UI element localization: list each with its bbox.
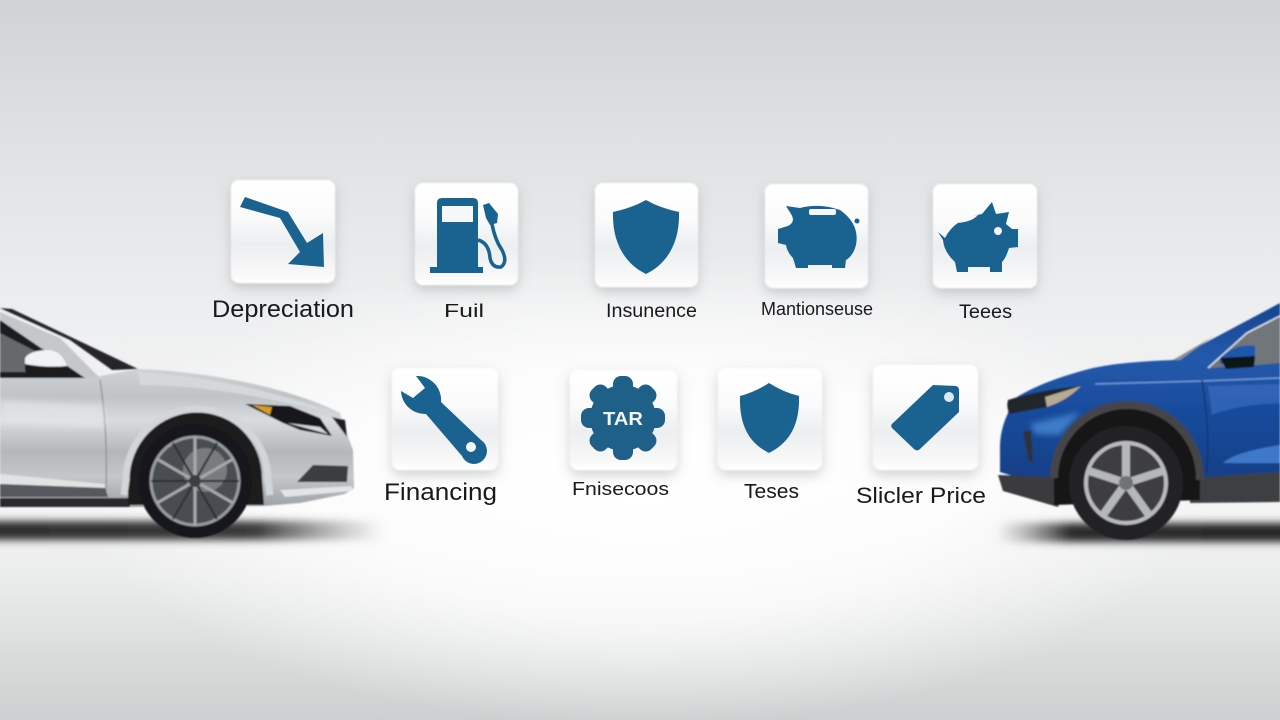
blue car belt line [1095,378,1280,384]
silver car side sill [0,474,130,507]
silver car door seam [100,380,106,493]
cost item: taxes [718,368,822,503]
cost item: fuel [415,183,518,321]
label: Insunence [606,301,697,322]
silver car mirror [25,350,68,377]
card [765,184,868,288]
blue car ground shadow [995,523,1280,542]
icon: price tag [891,385,959,450]
icon: gear with tax text: TAR [603,409,643,429]
blue car [995,303,1280,542]
blue car door seam [1202,380,1208,473]
blue car door highlight [1208,384,1280,463]
icon: shield [740,383,799,453]
icon: wrench [401,376,487,464]
silver car [0,308,385,540]
card [415,183,518,285]
silver car body [0,369,354,507]
label: Financing [384,479,497,506]
icon: shield [613,200,679,274]
icon: downward arrow [240,197,324,267]
card [595,183,698,287]
icon: piggy bank facing right [938,202,1018,272]
label: Teees [959,302,1012,323]
silver car wheel [138,424,252,538]
blue car lower trim [998,472,1280,507]
blue car side window [1208,316,1280,368]
label: Teses [744,481,799,503]
icon: piggy bank facing left [778,206,860,268]
blue car body [1000,303,1280,490]
silver car wheel arch [128,411,264,505]
cost item: depreciation [212,180,354,323]
silver car hood highlight [138,372,335,414]
label: Fuil [444,301,484,321]
blue car headlight [1007,386,1081,414]
cost item: financing [384,368,498,506]
card [392,368,498,470]
card [718,368,822,470]
silver car grille [280,417,352,497]
silver car headlight [245,404,332,436]
blue car wheel arch [1054,405,1200,505]
blue car windshield [1173,336,1214,360]
icon: fuel pump [430,198,505,273]
blue car bumper highlight [1023,412,1080,462]
blue car mirror [1220,346,1255,369]
card [231,180,335,283]
cost item: insurance [595,183,698,322]
cost item: fees [933,184,1037,323]
silver car ground shadow [0,521,385,540]
label: Depreciation [212,296,354,323]
blue car wheel [1069,426,1183,540]
card [873,365,978,470]
silver car roof and window [0,308,138,378]
card [933,184,1037,288]
label: Fnisecoos [572,479,669,499]
cost item: finance costs [570,370,677,499]
card [570,370,677,470]
label: Mantionseuse [761,299,873,319]
cost item: sticker price [856,365,986,508]
label: Slicler Price [856,483,986,508]
cost item: maintenance [761,184,873,319]
silver car door highlight [0,400,105,428]
